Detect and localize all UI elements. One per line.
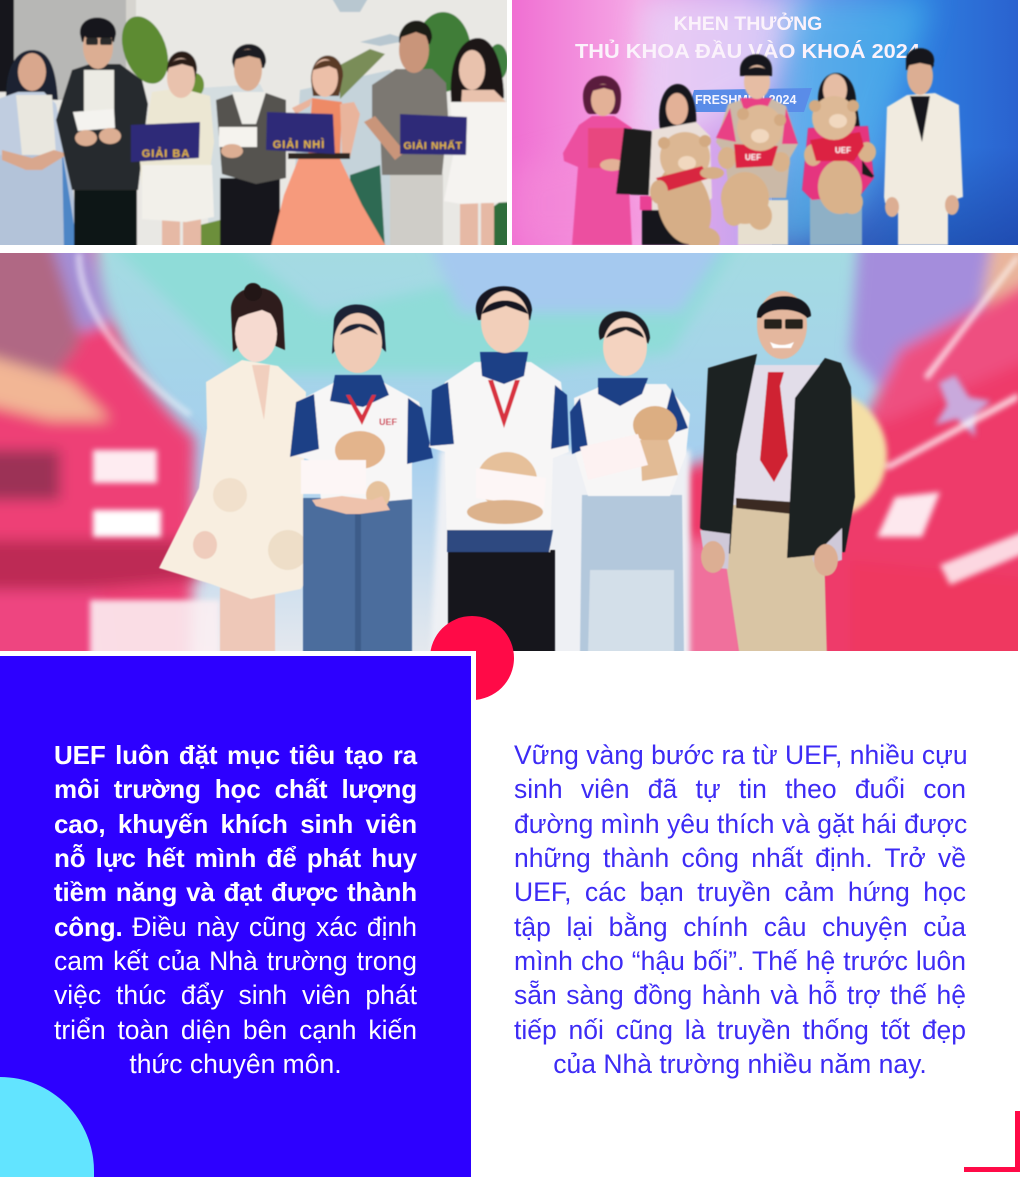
teddy bear with red shirt, left bbox=[649, 132, 724, 253]
photo: award winners with prize boards bbox=[0, 0, 507, 245]
decoration: red circle behind panel bbox=[430, 616, 514, 700]
text block: alumni story: những thành công nhất định. Trở về bbox=[514, 843, 966, 873]
text block: UEF commitment: cam kết của Nhà trường trong bbox=[54, 946, 417, 976]
person: woman in pink ao dai bbox=[563, 76, 632, 245]
person: woman in white dress bbox=[444, 38, 512, 250]
prize board: first prize: GIẢI NHẤT bbox=[403, 139, 463, 152]
person: woman in white rose blazer bbox=[159, 283, 309, 656]
person: student in grey vest bbox=[216, 44, 286, 250]
decoration: cyan circle bbox=[0, 1077, 94, 1177]
text block: UEF commitment: thức chuyên môn. bbox=[129, 1049, 342, 1079]
text block: UEF commitment: nỗ lực hết mình để phát huy bbox=[54, 843, 417, 873]
person: woman in blue floral dress bbox=[0, 50, 78, 250]
photo: three students with teddy bears and presenters bbox=[0, 253, 1018, 1170]
text block: alumni story: của Nhà trường nhiều năm nay. bbox=[553, 1049, 927, 1079]
text block: UEF commitment: UEF luôn đặt mục tiêu tạo ra bbox=[54, 740, 417, 770]
panel: blue statement bbox=[0, 656, 471, 1177]
text block: alumni story: UEF, các bạn truyền cảm hứng học bbox=[514, 877, 966, 907]
text block: UEF commitment: môi trường học chất lượng bbox=[54, 774, 417, 804]
prize board: third prize bbox=[131, 122, 200, 162]
person: female student, holding bear and envelope bbox=[570, 311, 690, 655]
decoration: red corner bracket bbox=[964, 1111, 1020, 1172]
stage welcome badge: FRESHMEN 2024 bbox=[695, 93, 796, 107]
person: man in grey t-shirt bbox=[364, 20, 448, 250]
text block: alumni story: tiếp nối cũng là truyền thống tốt đẹp bbox=[514, 1015, 966, 1045]
text block: UEF commitment: cao, khuyến khích sinh viên bbox=[54, 809, 417, 839]
teddy bear with red shirt, right: UEF bbox=[835, 146, 851, 155]
text block: alumni story: sẵn sàng đồng hành và hỗ trợ thế hệ bbox=[514, 980, 966, 1010]
stage headline bbox=[575, 11, 921, 63]
text block: alumni story: đường mình yêu thích và gặt hái được bbox=[514, 809, 967, 839]
prize board: third prize: GIẢI BA bbox=[142, 147, 190, 160]
text block: UEF commitment: công. Điều này cũng xác định bbox=[54, 912, 417, 942]
teddy bear with red shirt, right bbox=[804, 96, 876, 214]
person: woman in cream blouse bbox=[140, 51, 214, 250]
text block: UEF commitment bbox=[54, 740, 418, 1079]
prize board: second prize bbox=[266, 112, 335, 154]
text block: UEF commitment: tiềm năng và đạt được thành bbox=[54, 877, 417, 907]
person: male student with teddy bear bbox=[716, 54, 798, 245]
stage headline: KHEN THƯỞNG bbox=[674, 11, 822, 35]
text block: alumni story: Vững vàng bước ra từ UEF, nhiều cựu bbox=[514, 740, 968, 770]
text block: alumni story bbox=[514, 740, 968, 1079]
person: man in black blazer and red tie bbox=[700, 291, 855, 658]
person: student with first teddy bear bbox=[640, 84, 712, 245]
prop: black gift bag bbox=[616, 128, 676, 196]
teddy bear with red shirt, centre bbox=[718, 105, 790, 230]
prize board: second prize: GIẢI NHÌ bbox=[273, 138, 325, 151]
text block: UEF commitment: việc thúc đẩy sinh viên phát bbox=[54, 980, 417, 1010]
LED backdrop swirls bbox=[0, 223, 1024, 680]
person: male student, red lanyard bbox=[429, 286, 569, 655]
person: female student, navy collar polo bbox=[290, 304, 433, 658]
teddy bear with red shirt, centre: UEF bbox=[745, 153, 761, 162]
stage headline: THỦ KHOA ĐẦU VÀO KHOÁ 2024 bbox=[575, 39, 921, 63]
person: female student, navy collar polo: UEF bbox=[379, 417, 398, 427]
white frame of panel bbox=[0, 651, 476, 1177]
text block: UEF commitment: triển toàn diện bên cạnh kiến bbox=[54, 1015, 417, 1045]
person: student in black jacket bbox=[56, 18, 148, 250]
person: female student with glasses bbox=[802, 73, 874, 245]
prize board: first prize bbox=[400, 114, 467, 155]
person: man in white suit bbox=[884, 48, 963, 245]
stage welcome badge bbox=[688, 88, 812, 112]
photo: top freshmen award on stage bbox=[512, 0, 1018, 245]
text block: alumni story: tập lại bằng chính câu chuyện của bbox=[514, 912, 966, 942]
text block: alumni story: mình cho “hậu bối”. Thế hệ trước luôn bbox=[514, 946, 966, 976]
text block: alumni story: sinh viên đã tự tin theo đuổi con bbox=[514, 774, 966, 804]
person: woman in peach gown bbox=[270, 55, 388, 250]
